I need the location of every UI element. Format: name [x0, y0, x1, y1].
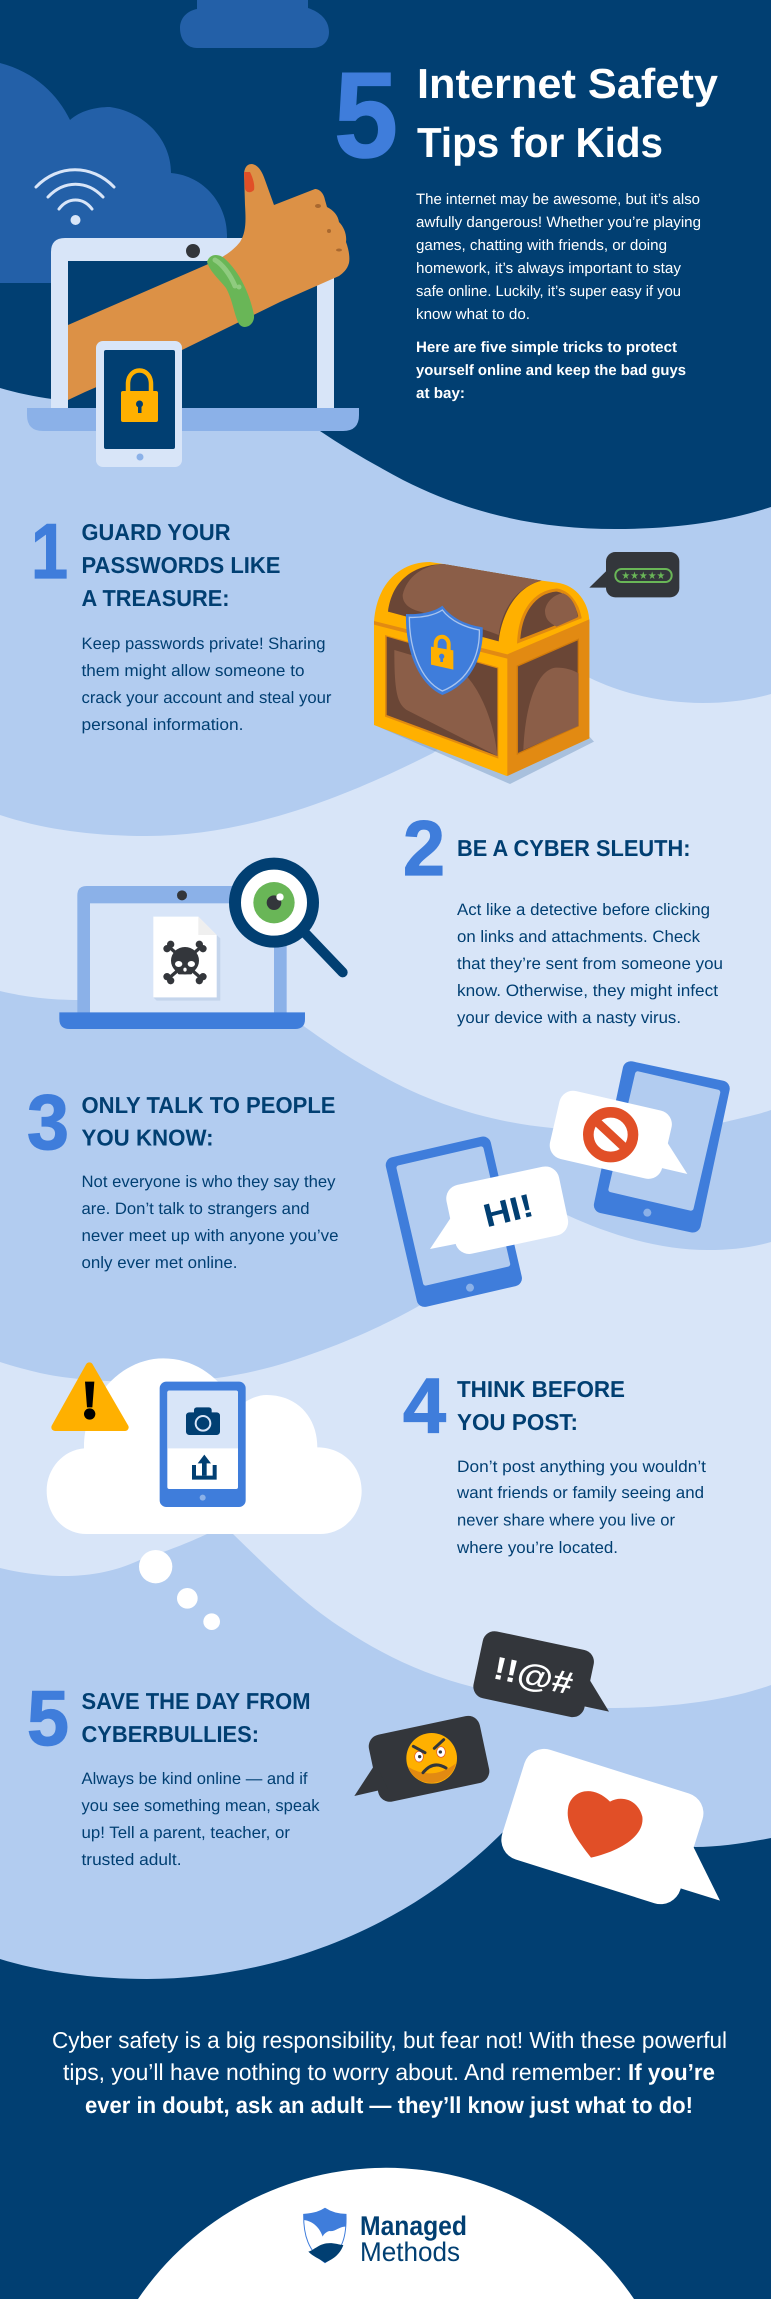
stop bubble — [547, 1088, 687, 1182]
illustration: treasure chest — [374, 562, 594, 784]
tip 5 text — [27, 1674, 320, 1869]
tip 1 text: A TREASURE: — [82, 585, 230, 611]
tip 3 text: Not everyone is who they say they — [82, 1173, 336, 1191]
left phone — [384, 1135, 524, 1309]
closing message — [52, 2027, 727, 2118]
symbols bubble — [471, 1629, 609, 1719]
tip 4 text: where you’re located. — [456, 1539, 618, 1557]
icon: wifi — [36, 170, 114, 225]
logo shield — [304, 2208, 346, 2263]
tip 5 text: up! Tell a parent, teacher, or — [82, 1824, 291, 1842]
tip 5 text: SAVE THE DAY FROM — [82, 1688, 310, 1714]
illustration: two phones with speech bubbles — [384, 1060, 731, 1309]
tip 2 text: that they’re sent from someone you — [457, 955, 723, 973]
tip 5 text: 5 — [27, 1674, 69, 1762]
tip 3 text: never meet up with anyone you’ve — [82, 1227, 338, 1245]
tip 4 text: never share where you live or — [457, 1512, 675, 1530]
title: 5 — [334, 47, 398, 183]
tip 2 text: Act like a detective before clicking — [457, 901, 710, 919]
intro text: Here are five simple tricks to protect — [416, 339, 677, 356]
wave band 2 — [0, 655, 771, 2299]
nail — [244, 172, 254, 192]
warning sign — [55, 1366, 125, 1427]
tip 1 text: Keep passwords private! Sharing — [82, 635, 326, 653]
tip 1 text: them might allow someone to — [82, 662, 304, 680]
footer white circle — [138, 2168, 634, 2299]
tip 2 text — [403, 804, 723, 1027]
tip 1 text: crack your account and steal your — [82, 689, 332, 707]
background cloud: left — [0, 63, 227, 283]
tip 2 text: 2 — [403, 804, 445, 892]
angry face bubble — [354, 1714, 492, 1804]
intro text: yourself online and keep the bad guys — [416, 362, 686, 379]
intro text: at bay: — [416, 385, 465, 402]
tip 3 text: ONLY TALK TO PEOPLE — [82, 1092, 336, 1118]
intro text: awfully dangerous! Whether you’re playing — [416, 214, 701, 231]
tip 1 text: 1 — [31, 507, 68, 595]
tip 3 text: are. Don’t talk to strangers and — [82, 1200, 310, 1218]
cloud — [47, 1358, 362, 1630]
bracelet — [207, 255, 254, 327]
intro text: know what to do. — [416, 306, 530, 323]
tip 4 text: THINK BEFORE — [457, 1376, 625, 1402]
tip 1 text: GUARD YOUR — [82, 519, 231, 545]
intro text: games, chatting with friends, or doing — [416, 237, 667, 254]
tip 5 text: Always be kind online — and if — [82, 1770, 308, 1788]
tip 5 text: trusted adult. — [82, 1851, 182, 1869]
arm — [68, 164, 349, 400]
closing message: ever in doubt, ask an adult — they’ll know just what to do! — [85, 2092, 693, 2118]
tip 2 text: know. Otherwise, they might infect — [457, 982, 718, 1000]
illustration: laptop with thumbs up arm and tablet — [27, 164, 359, 467]
tip 1 text: PASSWORDS LIKE — [82, 552, 280, 578]
tip 2 text: your device with a nasty virus. — [457, 1009, 681, 1027]
tip 5 text: you see something mean, speak — [82, 1797, 320, 1815]
tip 1 text: personal information. — [82, 716, 244, 734]
tip 4 text: want friends or family seeing and — [456, 1484, 704, 1502]
closing message: Cyber safety is a big responsibility, but fear not! With these powerful — [52, 2027, 727, 2053]
illustration: laptop, infected file and magnifier — [59, 864, 343, 1029]
logo: Managed Methods: Methods — [360, 2237, 460, 2267]
password speech bubble — [589, 552, 679, 597]
tip 4 text: YOU POST: — [457, 1409, 578, 1435]
phone — [160, 1382, 246, 1507]
hi bubble: HI! — [480, 1186, 537, 1234]
laptop — [27, 238, 359, 431]
tip 4 text: 4 — [403, 1362, 446, 1450]
wave band 4 — [0, 1204, 771, 2299]
logo: Managed Methods: Managed — [360, 2211, 467, 2241]
wave band 3 — [0, 991, 771, 2299]
tablet — [96, 341, 182, 467]
title: Tips for Kids — [417, 119, 663, 166]
tip 4 text — [403, 1362, 706, 1557]
tip 2 text: BE A CYBER SLEUTH: — [457, 835, 690, 861]
closing message: If you’re — [628, 2059, 715, 2085]
file with skull — [153, 917, 220, 1001]
tip 5 text: CYBERBULLIES: — [82, 1721, 259, 1747]
symbols bubble: !!@# — [490, 1650, 576, 1701]
tip 3 text — [27, 1078, 338, 1272]
logo: Managed Methods — [304, 2208, 467, 2267]
closing message: tips, you’ll have nothing to worry about. And remember: — [63, 2059, 622, 2085]
tip 1 text — [31, 507, 332, 734]
magnifier with eye — [235, 864, 343, 972]
tip 3 text: 3 — [27, 1078, 69, 1166]
illustration: chat bubbles — [354, 1629, 720, 1909]
shield — [406, 606, 483, 695]
title: Internet Safety — [417, 60, 719, 107]
tip 3 text: YOU KNOW: — [82, 1124, 214, 1150]
background cloud: top — [180, 0, 329, 48]
hi bubble — [430, 1164, 571, 1257]
right phone — [592, 1060, 731, 1234]
tip 3 text: only ever met online. — [82, 1254, 238, 1272]
title — [334, 47, 719, 183]
wave band 6: footer — [0, 1809, 771, 2299]
password speech bubble: ★★★★★ — [621, 570, 665, 582]
intro text: The internet may be awesome, but it’s also — [416, 191, 700, 208]
tip 2 text: on links and attachments. Check — [457, 928, 701, 946]
laptop — [59, 886, 305, 1029]
wave band 5 — [0, 1530, 771, 2299]
intro text — [416, 191, 701, 402]
tip 4 text: Don’t post anything you wouldn’t — [457, 1458, 706, 1476]
heart bubble — [496, 1744, 720, 1909]
illustration: thought cloud with phone and warning — [47, 1358, 362, 1630]
intro text: homework, it’s always important to stay — [416, 260, 682, 277]
intro text: safe online. Luckily, it’s super easy if you — [416, 283, 681, 300]
